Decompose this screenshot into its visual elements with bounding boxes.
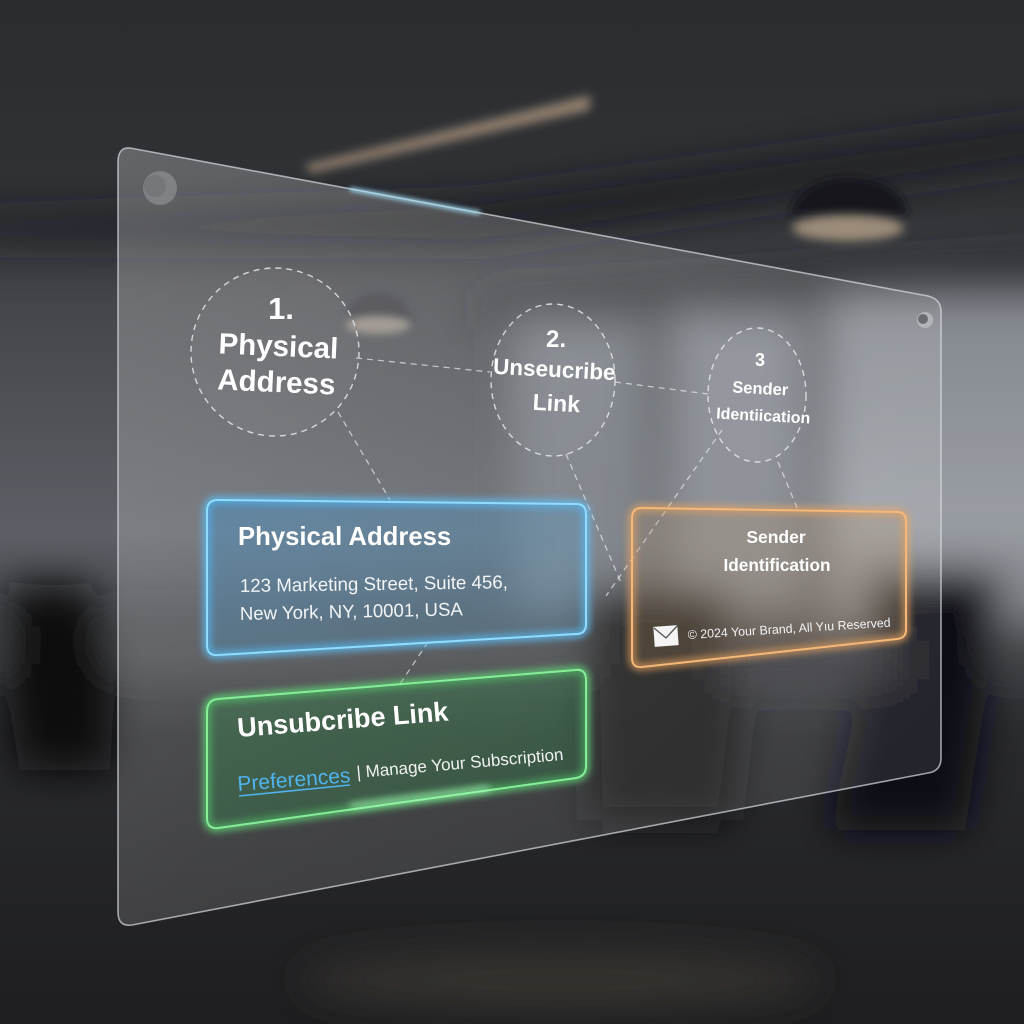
card: unsubscribe link: Unsubcribe Link <box>236 696 450 743</box>
circle 3: sender identification: Identiication <box>716 406 811 427</box>
card: unsubscribe link <box>207 670 586 828</box>
circle 2: unsubscribe link: Link <box>532 389 581 417</box>
card: physical address: New York, NY, 10001, USA <box>240 598 464 624</box>
card: physical address: 123 Marketing Street, Suite 456, <box>240 571 508 596</box>
card: sender identification: Identification <box>724 555 830 575</box>
card: unsubscribe link: | Manage Your Subscription <box>356 745 564 782</box>
circle 1: physical address: Physical <box>218 327 339 366</box>
card: sender identification <box>632 508 906 667</box>
icon: envelope <box>653 625 679 647</box>
card: physical address <box>207 500 586 655</box>
chairs <box>5 585 115 770</box>
mount screw top-left <box>143 171 177 205</box>
card: sender identification: © 2024 Your Brand, All Yıu Reserved <box>687 616 891 642</box>
glass panel <box>118 148 941 925</box>
mount screw top-right <box>917 312 933 328</box>
circle 3: sender identification: Sender <box>732 379 789 399</box>
card: sender identification: Sender <box>746 527 806 547</box>
circle 3: sender identification <box>708 328 811 462</box>
circle 1: physical address: Address <box>217 363 336 402</box>
circle 1: physical address: 1. <box>268 291 294 326</box>
circle 1: physical address <box>191 268 359 436</box>
circle 2: unsubscribe link: 2. <box>546 326 566 353</box>
pendant lamp <box>790 178 908 215</box>
circle 2: unsubscribe link <box>491 304 616 456</box>
card: unsubscribe link: Preferences <box>237 764 351 796</box>
circle 3: sender identification: 3 <box>755 350 765 370</box>
dashed connector lines <box>338 358 798 684</box>
ceiling light <box>305 95 590 173</box>
edge glow: left cyan <box>116 200 122 350</box>
circle 2: unsubscribe link: Unseucribe <box>493 354 616 385</box>
card: physical address: Physical Address <box>238 523 451 551</box>
